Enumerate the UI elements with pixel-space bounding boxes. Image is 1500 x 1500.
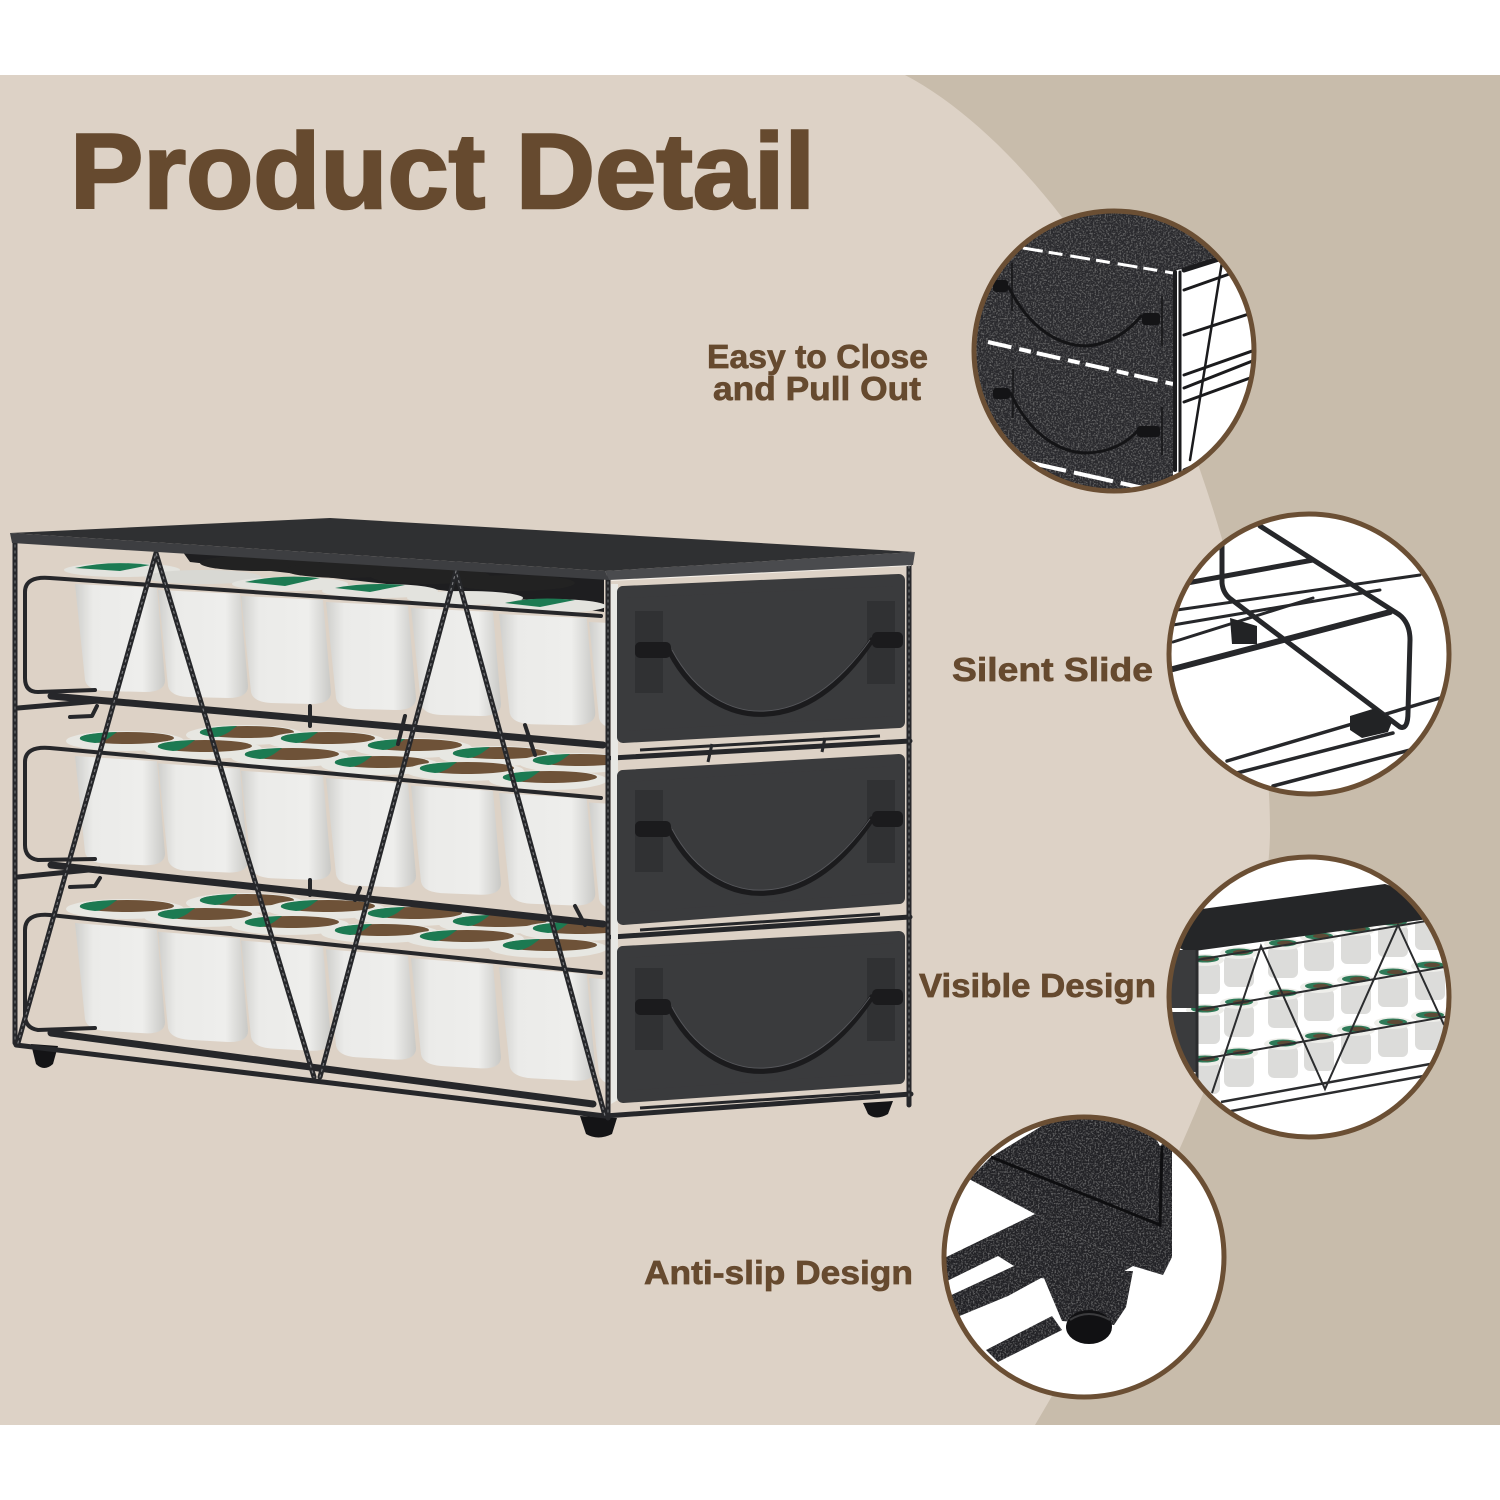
white gaps [988, 248, 1173, 488]
background panel: darker curved area [905, 75, 1500, 1425]
wire rails [15, 540, 911, 1118]
title: Product Detail [70, 111, 815, 231]
tier 1 slide wires [18, 578, 603, 755]
product: three-tier coffee pod drawer rack [10, 518, 915, 1138]
drawer 1 handle [635, 601, 903, 714]
triangle wire texture [18, 553, 605, 1116]
drawer 2 [623, 760, 903, 919]
detail circle: slide rail close up [1169, 514, 1449, 794]
mini pods [1186, 910, 1449, 1094]
label: visible design: Visible Design [919, 967, 1156, 1004]
tier 2 lids [66, 725, 637, 790]
label: easy to close: Easy to Close [707, 338, 928, 375]
rails [1173, 520, 1440, 786]
drawer 3 handle [635, 958, 903, 1071]
handles [1008, 263, 1162, 455]
tier 3 lids [66, 893, 637, 958]
tier 3 pods [75, 923, 679, 1089]
label: anti-slip design: Anti-slip Design [644, 1254, 913, 1291]
detail circle: drawers close up [970, 205, 1255, 497]
triangle side wires [18, 553, 605, 1116]
feet [31, 1044, 893, 1138]
thin wires [1197, 917, 1450, 1111]
drawer 3 [623, 937, 903, 1097]
upper plate and frame bar [969, 1112, 1172, 1275]
plate shadow line [991, 1146, 1162, 1225]
tier 2 pods [75, 756, 679, 912]
textured shelf and drawers [976, 214, 1215, 488]
handle tabs [993, 280, 1160, 437]
pods and lids [64, 555, 679, 1089]
frame texture [15, 545, 909, 1115]
side wires [1175, 258, 1255, 472]
rails and block [940, 1214, 1133, 1322]
label: easy to close [707, 338, 928, 407]
clips [1230, 618, 1392, 738]
tier 1 pods [75, 584, 679, 730]
tier 2 slide wires [18, 748, 603, 925]
drawer 1 [623, 580, 903, 737]
light strip behind drawers [611, 584, 618, 1104]
label: silent slide: Silent Slide [952, 651, 1153, 688]
frame outline [15, 540, 911, 1118]
back rails seen in drawer gaps [640, 736, 880, 1108]
foot cone [1041, 1271, 1133, 1325]
top shelf [10, 518, 915, 580]
left drawers [1172, 950, 1196, 1072]
back interior shadow under top shelf [180, 548, 604, 612]
drawer 2 handle [635, 780, 903, 893]
shelf [1180, 884, 1423, 950]
label: easy to close: and Pull Out [713, 370, 921, 407]
detail circle: anti-slip foot [940, 1112, 1224, 1397]
detail circle: rack front view [1165, 857, 1450, 1137]
rubber pad [1066, 1310, 1112, 1344]
tier 3 slide wires [25, 915, 601, 1104]
tier 1 lids [64, 563, 606, 612]
